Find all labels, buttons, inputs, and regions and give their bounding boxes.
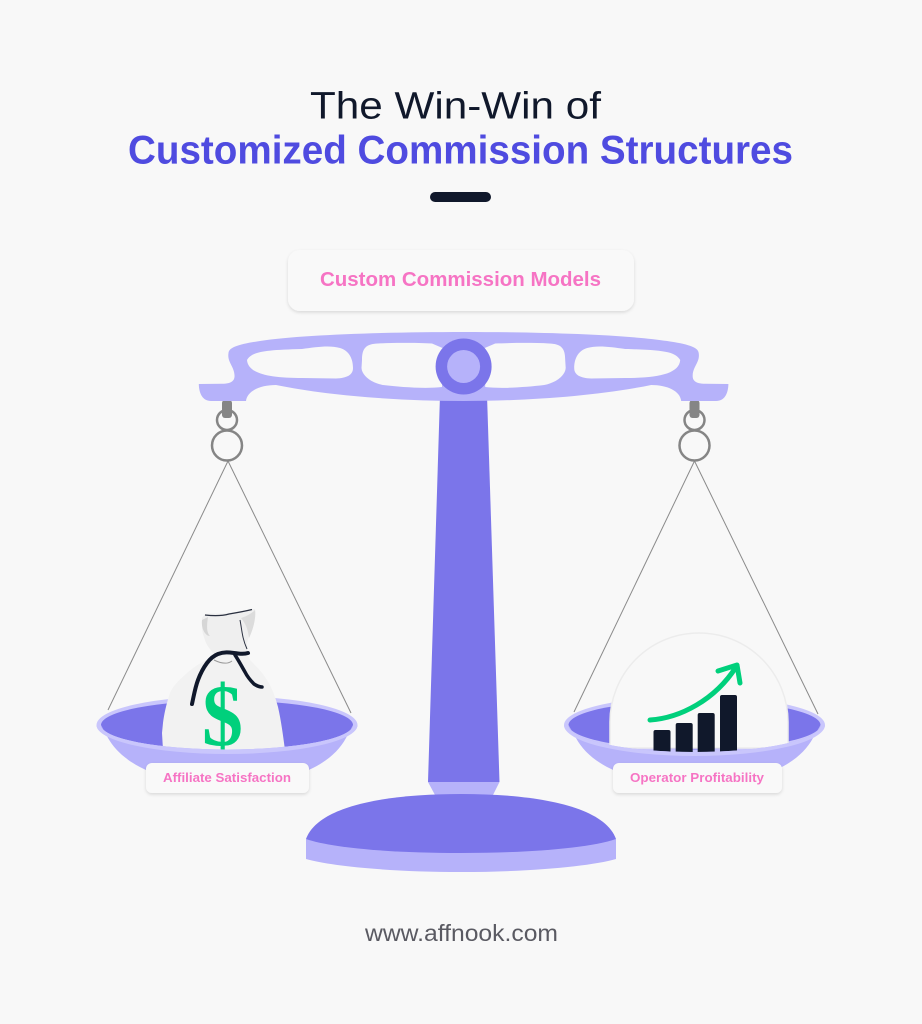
left hanger rings and strings [108, 400, 351, 713]
title divider [430, 192, 491, 202]
icon: growth chart circle [610, 633, 788, 758]
right pan with growth chart [564, 633, 825, 785]
scale beam [199, 332, 728, 401]
left pan with money bag [96, 609, 358, 785]
icon: dollar sign: $ [202, 668, 243, 765]
top label: custom commission models [288, 250, 634, 311]
scale base [306, 794, 616, 872]
title line 2: Customized Commission Structures [128, 128, 793, 172]
footer url: www.affnook.com [364, 920, 558, 946]
title line 1: The Win-Win of [310, 86, 601, 128]
left label: affiliate satisfaction [146, 763, 309, 793]
top label: custom commission models: Custom Commission Models [320, 269, 601, 291]
right label: operator profitability [613, 763, 782, 793]
left label: affiliate satisfaction: Affiliate Satisfaction [163, 771, 291, 785]
title [128, 86, 793, 172]
right label: operator profitability: Operator Profitability [630, 771, 764, 785]
bar chart [654, 695, 737, 758]
icon: money bag [162, 609, 285, 765]
scale pillar [428, 395, 500, 795]
arrow [650, 665, 740, 720]
right hanger rings and strings [574, 400, 818, 714]
